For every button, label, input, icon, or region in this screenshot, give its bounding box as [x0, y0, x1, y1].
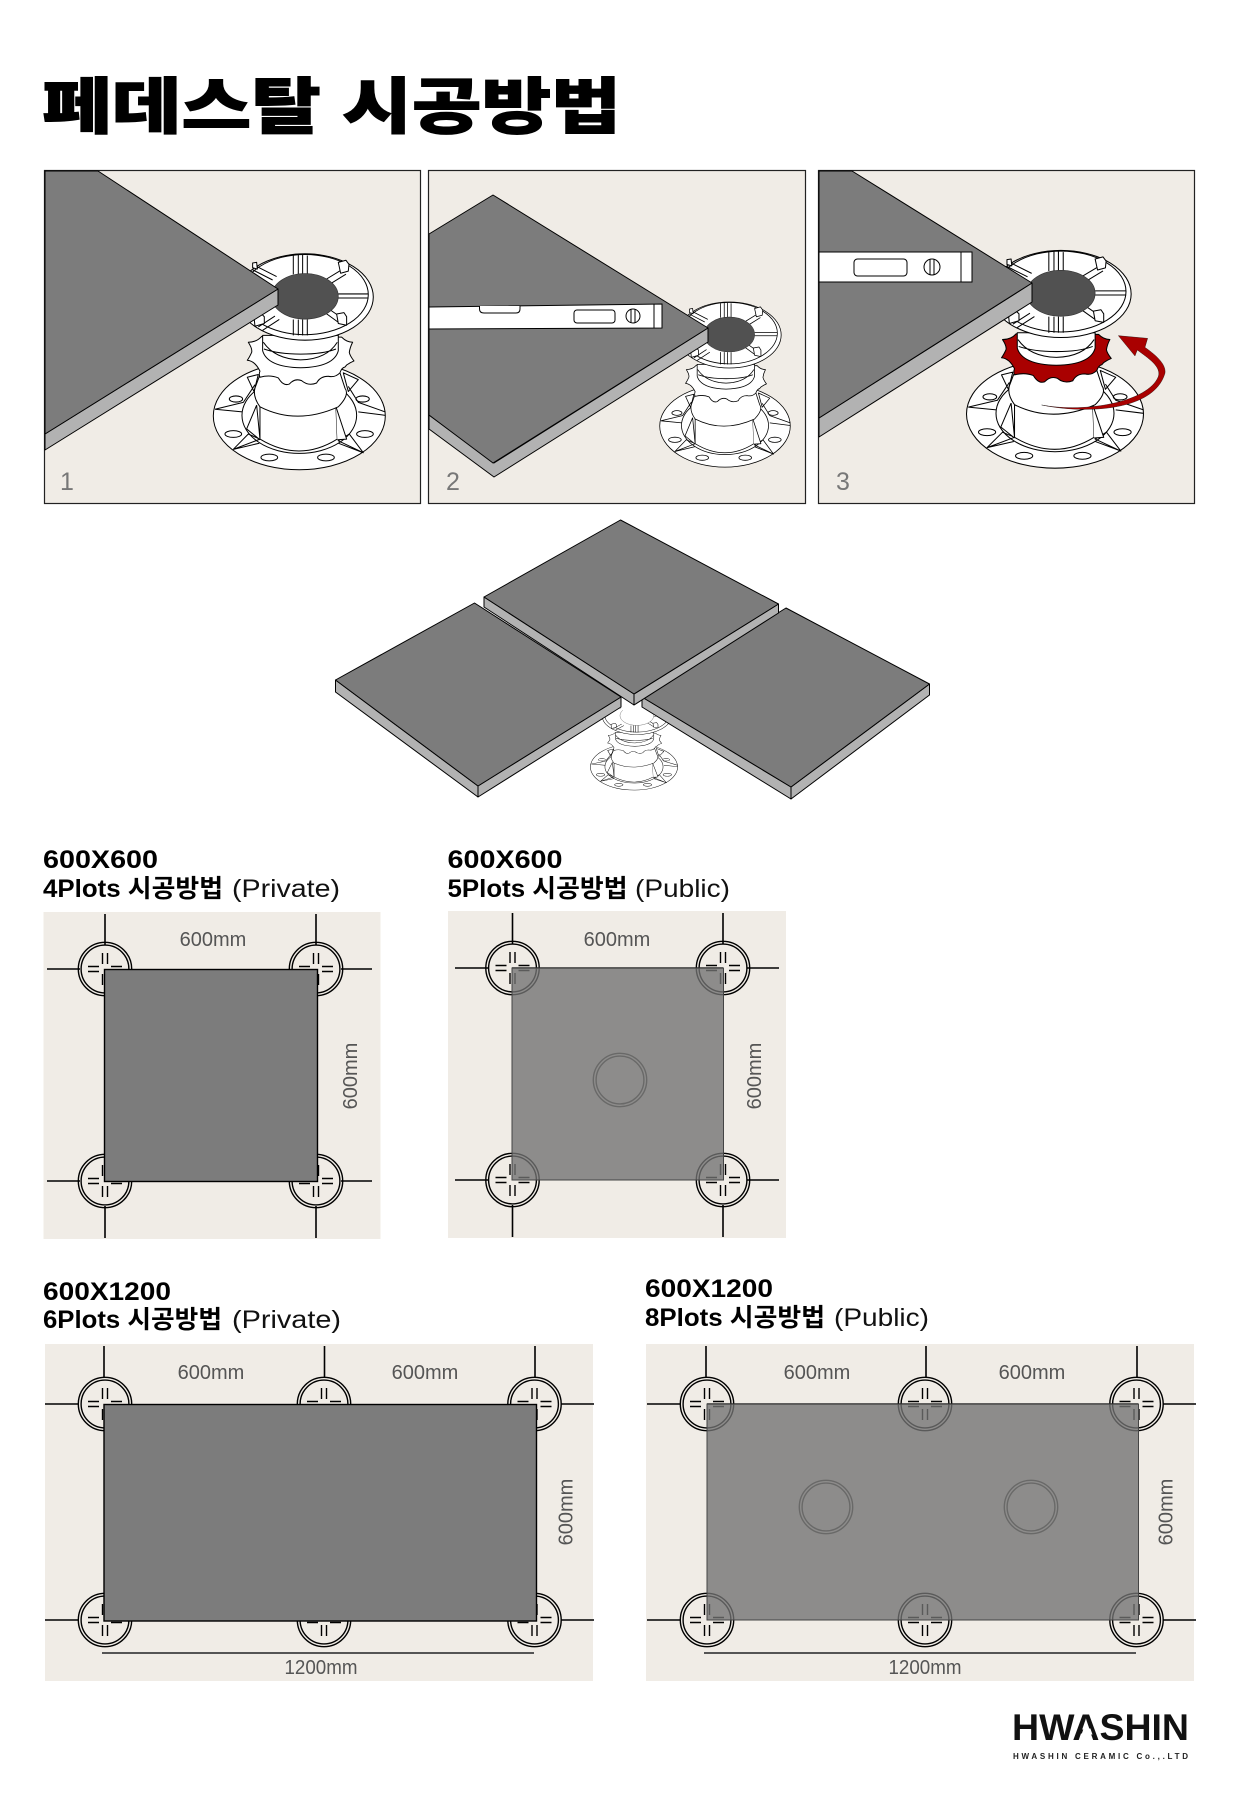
dimension labels: 600mm — [178, 1362, 244, 1384]
heading: 600X600 4Plots: (Private) — [232, 875, 340, 903]
heading: 600X600 5Plots: 600X600 — [448, 846, 562, 874]
dimension labels: 600mm — [556, 1479, 578, 1545]
translucent tile plan — [512, 968, 724, 1180]
heading: 600X1200 8Plots: 8Plots 시공방법 — [645, 1304, 825, 1332]
dimension labels: 1200mm — [888, 1657, 962, 1679]
title: 페데스탈 시공방법 — [42, 57, 621, 146]
heading: 600X600 4Plots: 600X600 — [43, 846, 158, 874]
plot markers — [680, 1377, 1163, 1647]
dimension labels: 600mm — [1156, 1479, 1178, 1545]
dimension side: 600mm — [340, 1043, 362, 1109]
panel: step 1 — [44, 170, 420, 504]
heading: 600X1200 6Plots — [43, 1278, 341, 1334]
heading: 600X1200 6Plots: 6Plots 시공방법 — [43, 1306, 222, 1334]
arrow: rotate gear — [1042, 336, 1165, 409]
panel: 5 plots plan — [448, 911, 786, 1238]
panel: 8 plots plan — [646, 1344, 1196, 1681]
illustration: three tiles on pedestal — [336, 520, 930, 799]
crosshair lines — [455, 913, 779, 1237]
center plot rings — [799, 1480, 1058, 1534]
logo: HWASHIN — [1012, 1707, 1189, 1748]
center plot ring — [593, 1053, 647, 1107]
step number 1: 1 — [60, 468, 74, 496]
panel: step 3 — [818, 170, 1194, 504]
heading: 600X1200 8Plots: (Public) — [834, 1304, 929, 1332]
plot markers — [78, 942, 343, 1208]
panel: 6 plots plan — [45, 1344, 594, 1681]
heading: 600X1200 6Plots: (Private) — [232, 1306, 341, 1334]
dimension labels — [178, 1362, 578, 1679]
dimension top: 600mm — [180, 929, 246, 951]
heading: 600X600 5Plots: 5Plots 시공방법 — [448, 875, 628, 903]
tile top — [484, 520, 778, 705]
column under joint — [621, 698, 642, 714]
dimension labels — [784, 1362, 1178, 1679]
dimension top: 600mm — [584, 929, 650, 951]
heading: 600X1200 8Plots: 600X1200 — [645, 1275, 773, 1303]
crosshair lines — [647, 1346, 1196, 1620]
crosshair lines — [45, 1346, 594, 1620]
translucent tile plan — [707, 1404, 1138, 1620]
heading: 600X1200 8Plots — [645, 1275, 929, 1332]
dimension labels: 600mm — [784, 1362, 850, 1384]
icon: pedestal under tiles — [590, 697, 678, 790]
tile right — [642, 608, 930, 799]
heading: 600X600 5Plots: (Public) — [635, 875, 730, 903]
heading: 600X600 4Plots — [43, 846, 340, 903]
dimension line — [102, 1652, 534, 1654]
dimension side: 600mm — [744, 1043, 766, 1109]
dimension labels: 1200mm — [284, 1657, 358, 1679]
dimension labels: 600mm — [392, 1362, 458, 1384]
tile step 1 — [45, 171, 278, 450]
tile left — [336, 603, 621, 797]
heading: 600X1200 6Plots: 600X1200 — [43, 1278, 171, 1306]
panel: 4 plots plan — [44, 912, 380, 1239]
step number 3: 3 — [836, 468, 850, 496]
tile step 3 — [819, 171, 1032, 437]
tile plan — [104, 970, 318, 1182]
spirit level step 3 — [819, 252, 972, 282]
tile plan — [104, 1404, 536, 1621]
icon: pedestal with red gear — [967, 250, 1143, 468]
crosshair lines — [47, 914, 372, 1238]
tile step 2 — [429, 195, 708, 477]
logo: HWASHIN CERAMIC Co.,.LTD — [1013, 1752, 1188, 1761]
spirit level step 2 — [429, 304, 662, 329]
dimension labels: 600mm — [999, 1362, 1065, 1384]
panel: step 2 — [428, 170, 806, 504]
heading: 600X600 5Plots — [448, 846, 730, 903]
step number 2: 2 — [446, 468, 460, 496]
plot markers — [78, 1377, 561, 1647]
dimension line — [704, 1652, 1136, 1654]
heading: 600X600 4Plots: 4Plots 시공방법 — [43, 875, 223, 903]
icon: pedestal step 1 — [213, 254, 385, 470]
icon: pedestal step 2 — [660, 302, 790, 467]
plot markers — [486, 941, 750, 1207]
